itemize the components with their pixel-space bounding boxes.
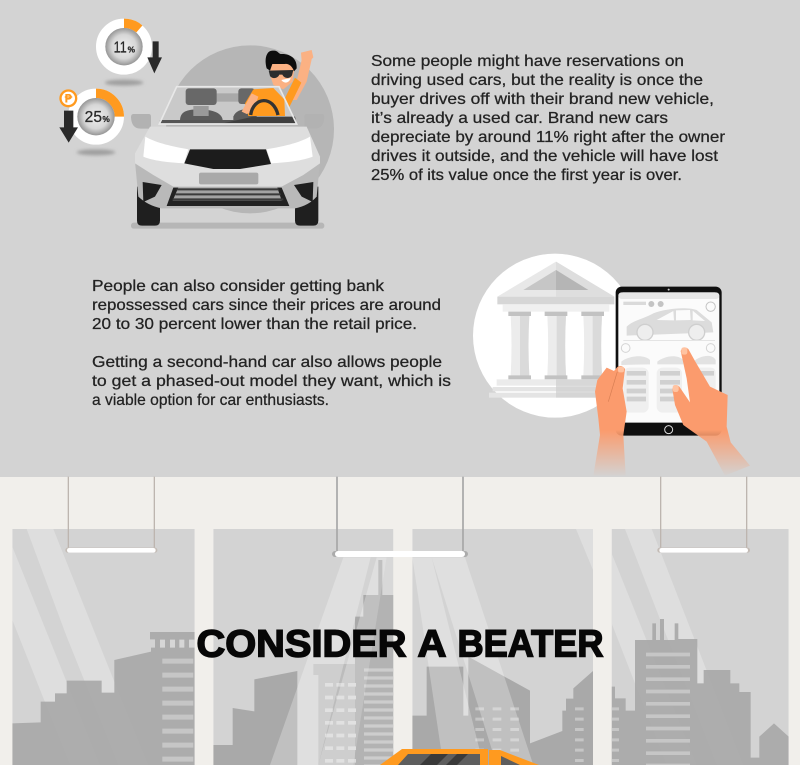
text block: repossessed cars: a viable option for car enthusiasts. [92,392,329,409]
tablet: listing cards [621,356,716,413]
heading: CONSIDER [196,623,406,665]
lamp: center left rod [334,477,339,552]
lower showroom background [0,477,800,765]
donut chart: 25%: 25 [85,109,102,126]
showroom: right half [412,477,789,765]
text block: repossessed cars [92,278,451,409]
icon: peso badge: ₱ [64,92,72,106]
heading: BEATER [458,623,604,665]
lamp: left [65,477,157,553]
side mirrors [131,114,324,129]
icon: driver [245,50,313,116]
icon: peso badge [59,89,77,107]
tablet: car listing [621,301,715,352]
donut chart: 25%: % [102,114,110,124]
text block: repossessed cars: People can also consider getting bank [92,278,384,295]
illustration: car with driver and depreciation charts [59,23,334,229]
donut chart: 25% [73,93,119,155]
windshield and interior [159,87,297,124]
tires [137,187,318,226]
icon: left hand [593,366,627,476]
window 4 [612,529,789,765]
car body [135,127,320,208]
lamp: center right rod [460,477,465,552]
heading: A [418,623,446,665]
donut chart: 11%: % [128,44,136,54]
icon: right hand [672,347,750,476]
donut chart: 11% [101,23,147,86]
text block: repossessed cars: 20 to 30 percent lower than the retail price. [92,316,417,333]
text block: depreciation: drives it outside, and the vehicle will have lost [371,148,719,165]
ground shadow [131,223,324,229]
icon: orange beater car roof [380,749,539,765]
text block: repossessed cars: to get a phased-out model they want, which is [92,373,451,390]
window 1 [12,529,195,765]
icon: bank building [489,262,622,398]
text block: depreciation: Some people might have reservations on [371,53,684,70]
text block: repossessed cars: Getting a second-hand car also allows people [92,354,442,371]
text block: repossessed cars: repossessed cars since their prices are around [92,297,441,314]
text block: depreciation [371,53,725,184]
backdrop circle [166,45,334,213]
lamp: center [332,551,468,557]
heading [196,623,604,665]
lamp: right [657,477,750,553]
showroom: left half [12,477,393,765]
text block: depreciation: it’s already a used car. Brand new cars [371,110,668,127]
arrow: 11% down [147,41,162,73]
window 2 [213,529,393,765]
text block: depreciation: 25% of its value once the first year is over. [371,167,682,184]
arrow: 25% down [59,111,78,143]
text block: depreciation: depreciate by around 11% right after the owner [371,129,725,146]
text block: depreciation: driving used cars, but the reality is once the [371,72,703,89]
text block: depreciation: buyer drives off with their brand new vehicle, [371,91,714,108]
backdrop circle [473,254,637,418]
donut chart: 11%: 11 [114,39,127,56]
window 3 [412,529,593,765]
tablet [616,287,722,436]
illustration: bank and tablet [473,254,750,476]
